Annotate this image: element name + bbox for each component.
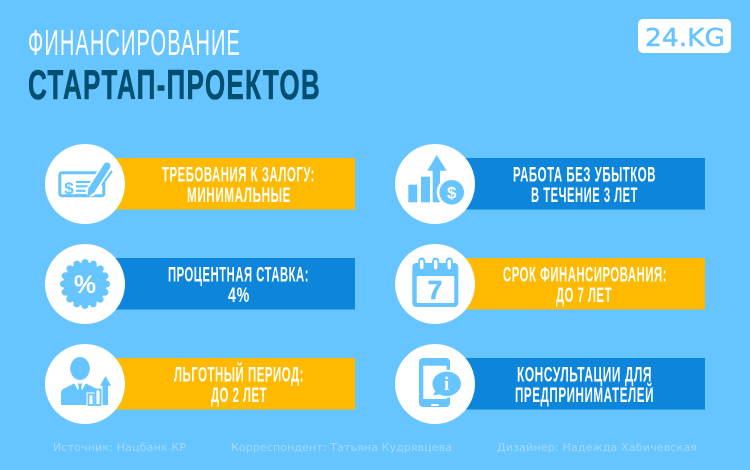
footer credits: Дизайнер: Надежда Хабичевская (497, 441, 697, 454)
panel: consultations (395, 344, 705, 424)
footer credits (53, 441, 697, 454)
icon: calendar: 7 (428, 275, 442, 305)
label: ЛЬГОТНЫЙ ПЕРИОД: (174, 362, 304, 386)
icon: percent badge (64, 262, 106, 306)
label: 4% (228, 284, 250, 307)
footer credits: Источник: Нацбанк КР (53, 441, 186, 454)
label (515, 364, 654, 407)
label: ДО 7 ЛЕТ (556, 284, 612, 307)
icon: phone with info bubble: i (444, 374, 449, 395)
panel: collateral requirements (45, 144, 355, 224)
icon: businessman with chart (61, 357, 111, 406)
label: КОНСУЛЬТАЦИИ ДЛЯ (517, 364, 652, 386)
icon: calendar (412, 261, 458, 307)
logo badge: 24.KG (645, 23, 725, 52)
label (168, 264, 309, 307)
label: ДО 2 ЛЕТ (211, 384, 267, 407)
panel: grace period (45, 344, 355, 424)
label (503, 264, 667, 307)
logo badge (638, 19, 731, 53)
label (513, 164, 656, 207)
icon: growth chart with coin: $ (447, 184, 457, 202)
icon: growth chart with coin (408, 155, 467, 207)
icon: percent badge: % (74, 271, 96, 299)
label (162, 164, 315, 207)
panel: financing term (395, 244, 705, 324)
label: ПРОЦЕНТНАЯ СТАВКА: (168, 264, 309, 286)
panel: no losses for 3 years (395, 144, 705, 224)
title (28, 22, 321, 108)
label (174, 362, 304, 407)
title line 2: СТАРТАП-ПРОЕКТОВ (28, 61, 321, 108)
label: МИНИМАЛЬНЫЕ (187, 184, 291, 207)
label: В ТЕЧЕНИЕ 3 ЛЕТ (531, 184, 638, 207)
panel: interest rate (45, 244, 355, 324)
footer credits: Корреспондент: Татьяна Кудрявцева (231, 441, 452, 454)
icon: phone with info bubble (419, 358, 463, 407)
label: ТРЕБОВАНИЯ К ЗАЛОГУ: (162, 164, 315, 186)
icon: cheque and pen (60, 166, 112, 198)
icon: cheque and pen: $ (64, 179, 74, 198)
title line 1: ФИНАНСИРОВАНИЕ (28, 22, 241, 63)
